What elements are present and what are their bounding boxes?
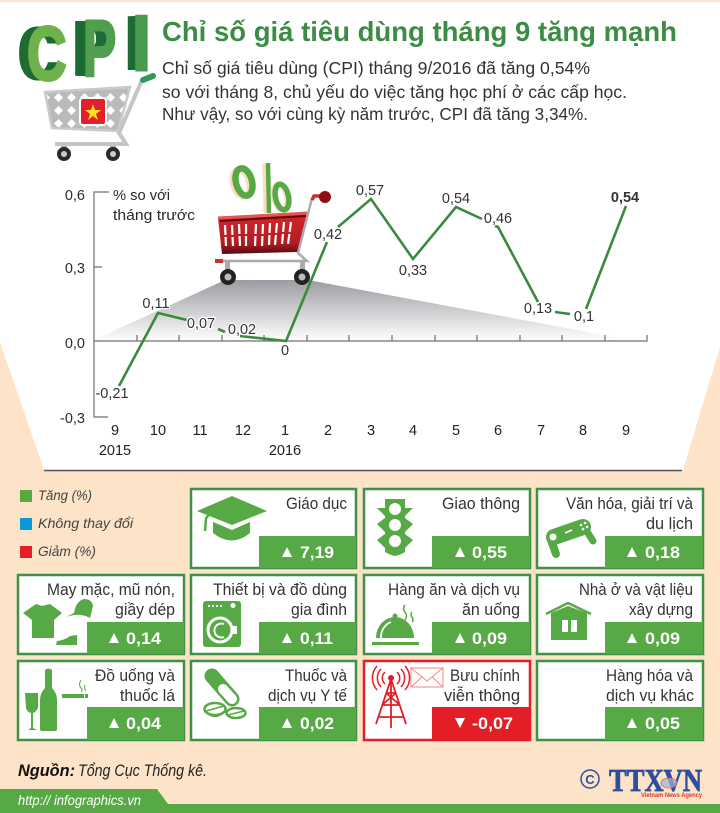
card: Giao thông: Giao thông (442, 495, 520, 513)
month labels: 5 (452, 423, 460, 439)
data labels: 0,13 (524, 301, 552, 317)
data labels: 0,54 (442, 191, 470, 207)
logo: TTXVN: TTXVN (609, 762, 702, 798)
axis unit note (113, 188, 195, 224)
month labels: 2 (324, 423, 332, 439)
card: Thuốc và dịch vụ Y tế (191, 661, 356, 740)
data labels: 0,42 (314, 227, 342, 243)
icon: traffic light (377, 499, 413, 556)
card: May mặc, mũ nón, giầy dép: May mặc, mũ nón, (47, 581, 175, 599)
data labels: 0,07 (187, 316, 215, 332)
card: Giao thông (364, 489, 530, 568)
source: Tổng Cục Thống kê. (78, 761, 207, 780)
icon: clothes (23, 599, 93, 645)
card: Nhà ở và vật liệu xây dựng: 0,09 (645, 629, 680, 648)
card: Đồ uống và thuốc lá: Đồ uống và (95, 667, 176, 685)
data labels: 0,57 (356, 183, 384, 199)
intro text: Như vậy, so với cùng kỳ năm trước, CPI đã tăng 3,34%. (162, 104, 588, 124)
logo: TTXVN: C (585, 772, 595, 787)
card: Hàng ăn và dịch vụ ăn uống: ăn uống (462, 601, 520, 619)
card: Thuốc và dịch vụ Y tế: 0,02 (300, 714, 334, 733)
month labels (99, 423, 630, 459)
month labels: 2015 (99, 443, 131, 459)
axis unit note: tháng trước (113, 208, 195, 224)
data labels: -0,21 (95, 386, 129, 402)
card: Hàng hóa và dịch vụ khác: Hàng hóa và (606, 667, 694, 685)
month labels: 4 (409, 423, 417, 439)
y axis labels (60, 188, 85, 427)
intro text (162, 58, 627, 124)
logo: TTXVN: Vietnam News Agency (641, 793, 703, 799)
logo: 3D CPI letters: I (132, 0, 151, 87)
card: May mặc, mũ nón, giầy dép (18, 575, 184, 654)
logo: TTXVN (581, 762, 703, 799)
month labels: 11 (192, 423, 208, 439)
icon: house (546, 603, 591, 640)
card: Văn hóa, giải trí và du lịch (537, 489, 703, 568)
intro text: Chỉ số giá tiêu dùng (CPI) tháng 9/2016 đã tăng 0,54% (162, 58, 590, 78)
axes (94, 192, 647, 417)
legend: Tăng (%) (38, 487, 92, 503)
month labels: 12 (235, 423, 251, 439)
month labels: 2016 (269, 443, 301, 459)
title: Chỉ số giá tiêu dùng tháng 9 tăng mạnh (162, 16, 677, 47)
card: Thiết bị và đồ dùng gia đình (191, 575, 356, 654)
card: Giáo dục: Giáo dục (286, 495, 347, 513)
legend (20, 487, 134, 559)
data labels: 0,33 (399, 263, 427, 279)
card: May mặc, mũ nón, giầy dép: 0,14 (126, 629, 162, 648)
data labels: 0,54 (611, 190, 639, 206)
card: Hàng hóa và dịch vụ khác: 0,05 (645, 714, 680, 733)
source: Nguồn: (18, 761, 75, 780)
month labels: 10 (150, 423, 166, 439)
card: Giáo dục: 7,19 (300, 543, 334, 562)
data labels: 0,46 (484, 211, 512, 227)
logo: 3D CPI letters: P (83, 4, 116, 93)
month labels: 3 (367, 423, 375, 439)
icon: red cart with percent sign (215, 163, 331, 285)
icon: food cloche (372, 605, 419, 645)
card: Đồ uống và thuốc lá: 0,04 (126, 714, 162, 733)
source (18, 761, 207, 780)
card: Văn hóa, giải trí và du lịch: 0,18 (645, 543, 680, 562)
white header and chart panel (0, 2, 720, 470)
y axis labels: 0,0 (65, 336, 85, 352)
card: Hàng ăn và dịch vụ ăn uống: Hàng ăn và dịch vụ (388, 581, 520, 599)
icon: graduation cap (197, 496, 267, 540)
logo: 3D CPI letters (19, 0, 151, 97)
data labels: 0,02 (228, 322, 256, 338)
card: Nhà ở và vật liệu xây dựng: Nhà ở và vật liệu (579, 581, 693, 599)
icon: antenna tower and envelope (372, 666, 443, 728)
footer bar with URL: http:// infographics.vn (18, 793, 141, 808)
legend: Không thay đổi (38, 515, 134, 531)
card: Nhà ở và vật liệu xây dựng: xây dựng (629, 601, 693, 619)
data line (119, 199, 626, 386)
month labels: 9 (622, 423, 630, 439)
intro text: so với tháng 8, chủ yếu do việc tăng học phí ở các cấp học. (162, 82, 627, 102)
month labels: 8 (579, 423, 587, 439)
y axis labels: -0,3 (60, 411, 85, 427)
card: Hàng ăn và dịch vụ ăn uống: 0,09 (472, 629, 507, 648)
card: May mặc, mũ nón, giầy dép: giầy dép (115, 601, 175, 619)
card: Nhà ở và vật liệu xây dựng (537, 575, 703, 654)
card: Hàng ăn và dịch vụ ăn uống (364, 575, 530, 654)
y axis labels: 0,3 (65, 261, 85, 277)
logo: 3D CPI letters: C (27, 12, 67, 97)
icon: pills (204, 676, 246, 718)
data labels: 0,11 (142, 296, 170, 312)
card: Thiết bị và đồ dùng gia đình: Thiết bị và đồ dùng (213, 581, 347, 599)
data labels: 0 (281, 343, 289, 359)
card: Bưu chính viễn thông (364, 661, 530, 740)
card: Đồ uống và thuốc lá (18, 661, 184, 740)
data labels: 0,1 (574, 309, 594, 325)
chart background shape (96, 280, 636, 341)
card: Bưu chính viễn thông: -0,07 (472, 714, 513, 733)
month labels: 6 (494, 423, 502, 439)
footer bar with URL (0, 789, 720, 813)
card: Thiết bị và đồ dùng gia đình: 0,11 (300, 629, 333, 648)
axis unit note: % so với (113, 188, 170, 204)
month labels: 7 (537, 423, 545, 439)
y axis labels: 0,6 (65, 188, 85, 204)
data labels (95, 183, 639, 402)
card: Văn hóa, giải trí và du lịch: du lịch (646, 515, 693, 533)
legend: Giảm (%) (38, 543, 96, 559)
card: Bưu chính viễn thông: Bưu chính (450, 667, 520, 685)
chart: monthly CPI line (60, 183, 647, 459)
card: Hàng hóa và dịch vụ khác: dịch vụ khác (606, 687, 694, 705)
icon: game controller (550, 522, 593, 554)
icon: bottle, glass and cigarette (25, 668, 88, 731)
card: Giao thông: 0,55 (472, 543, 507, 562)
card: Đồ uống và thuốc lá: thuốc lá (120, 687, 176, 705)
icon: washing machine (203, 601, 241, 647)
icon: shopping cart with Vietnam flag (45, 76, 153, 161)
month labels: 9 (111, 423, 119, 439)
month labels: 1 (281, 423, 289, 439)
card: Giáo dục (191, 489, 356, 568)
card: Thuốc và dịch vụ Y tế: dịch vụ Y tế (268, 687, 347, 705)
card: Bưu chính viễn thông: viễn thông (444, 686, 520, 705)
card: Hàng hóa và dịch vụ khác (537, 661, 703, 740)
card: Văn hóa, giải trí và du lịch: Văn hóa, giải trí và (566, 495, 694, 513)
card: Thiết bị và đồ dùng gia đình: gia đình (291, 601, 347, 619)
card: Thuốc và dịch vụ Y tế: Thuốc và (285, 667, 348, 685)
